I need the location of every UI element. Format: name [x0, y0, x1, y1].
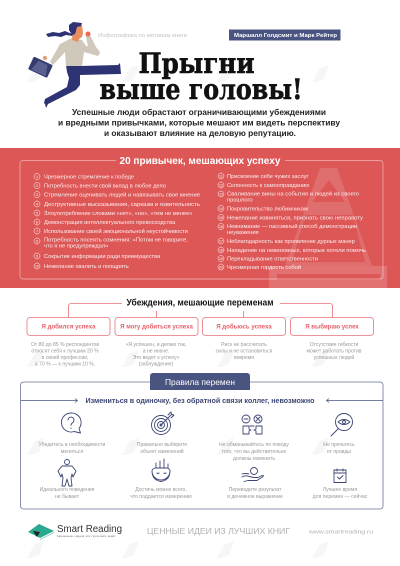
- habits left column: 2: [36, 184, 38, 188]
- belief 1: а 70 % — к лучшим 10 %.: [35, 362, 95, 368]
- rules heading: Правила перемен: [165, 377, 235, 387]
- rule text 8: для перемен — сейчас: [313, 493, 368, 500]
- rule text 6: что поддается измерению: [130, 494, 192, 500]
- rule text 4: [323, 442, 355, 455]
- rule text 6: [130, 487, 192, 500]
- rule text 7: Переводите результат: [229, 487, 282, 493]
- habits right column: 19: [219, 257, 223, 261]
- habits left column: 7: [36, 230, 38, 234]
- rule text 5: не бывает: [55, 494, 80, 500]
- footer logo: Ценные идеи из лучших книг: [57, 534, 116, 538]
- belief 4: Я выбираю успех: [305, 324, 359, 330]
- habits right column: Чрезмерная гордость собой: [227, 264, 301, 271]
- habits left column: Потребность внести свой вклад в любое дело: [44, 182, 166, 190]
- illustration: running businessman: [28, 22, 121, 108]
- habits right column: Нежелание извиняться, признать свою неправоту: [227, 216, 363, 222]
- habits heading: 20 привычек, мешающих успеху: [120, 156, 281, 167]
- habits right column: 16: [219, 225, 223, 229]
- belief 2: Я могу добиться успеха: [120, 324, 193, 330]
- habits left column: [34, 174, 200, 270]
- rule text 2: [137, 442, 187, 455]
- icon: heads exchanging: [242, 415, 262, 434]
- rules frame: [20, 382, 383, 509]
- rule text 5: Идеального поведения: [40, 487, 95, 493]
- habits left column: Чрезмерное стремление к победе: [44, 174, 134, 180]
- habits right column: 14: [219, 207, 223, 211]
- belief 4: может работать против: [306, 348, 362, 354]
- habits right column: неуважения: [227, 230, 259, 236]
- icon: superhero figure: [58, 460, 76, 486]
- habits left column: Демонстрация интеллектуального превосходства: [44, 220, 176, 226]
- habits left column: Использование своей эмоциональной неустойчивости: [44, 228, 188, 235]
- belief 1: От 80 до 85 % респондентов: [31, 342, 99, 348]
- habits right column: Покровительство любимчикам: [227, 206, 308, 212]
- rules subtitle: Измениться в одиночку, без обратной связи коллег, невозможно: [86, 397, 314, 405]
- footer website: www.smartreading.ru: [308, 530, 373, 536]
- habits left column: 10: [35, 264, 39, 268]
- torso and arms: [50, 38, 100, 66]
- habits right column: Склонность к самооправданию: [227, 183, 310, 189]
- habits left column: 8: [36, 240, 38, 244]
- habits right column: 13: [219, 192, 223, 196]
- rule text 4: от правды: [327, 449, 351, 455]
- rule text 8: [313, 487, 368, 500]
- habits right column: 11: [219, 174, 223, 178]
- habits left column: что я не предупреждал»: [44, 244, 108, 250]
- habits right column: Сваливание вины на события и людей из своего: [227, 190, 359, 198]
- title: Прыгни: [138, 47, 254, 80]
- icon: eye in magnifier: [331, 414, 352, 436]
- habits right column: 20: [219, 266, 223, 270]
- belief 3: Риск не рассчитать: [221, 342, 267, 348]
- belief 3: вовремя: [234, 355, 254, 361]
- rule text 3: должны изменить: [233, 456, 275, 462]
- habits left column: 1: [36, 175, 38, 179]
- rule text 7: [227, 487, 283, 500]
- connector lines: [68, 304, 332, 317]
- watermark letter A: [285, 168, 372, 266]
- belief 1: в своей профессии,: [42, 354, 88, 361]
- briefcase: [28, 56, 53, 78]
- belief 2: а не иначе.: [143, 348, 169, 354]
- trousers: [44, 63, 121, 108]
- icon: calendar check: [334, 469, 346, 482]
- habits left column: Сокрытие информации ради преимущества: [44, 254, 161, 260]
- rule text 7: в денежное выражение: [227, 494, 283, 500]
- habits right column: 18: [219, 248, 223, 252]
- rules heading: [150, 373, 250, 390]
- belief 3: силы и не остановиться: [216, 348, 273, 354]
- arrows: [21, 398, 383, 402]
- rule text 4: Не прячьтесь: [323, 442, 355, 448]
- title: выше головы!: [100, 73, 302, 106]
- belief 3: Я добьюсь успеха: [216, 324, 272, 330]
- rule text 3: [219, 441, 289, 462]
- habits right column: [218, 173, 366, 271]
- rule text 2: Правильно выберите: [137, 442, 187, 448]
- belief 4: [290, 318, 374, 361]
- belief 4: Отсутствие гибкости: [310, 342, 359, 348]
- habits left column: Потребность посеять сомнения: «Потом не говорите,: [44, 238, 188, 244]
- belief 3: [202, 318, 286, 361]
- habits left column: 3: [36, 193, 38, 197]
- habits left column: Злоупотребление словами «нет», «но», «тем не менее»: [44, 211, 192, 217]
- habits left column: Стремление оценивать людей и навязывать свое мнение: [44, 192, 200, 198]
- habits right column: 15: [219, 216, 223, 220]
- subtitle: Успешные люди обрастают ограничивающими убеждениями: [72, 108, 326, 117]
- rule text 1: меняться: [61, 449, 83, 455]
- belief 1: относят себя к лучшим 20 %: [31, 348, 99, 354]
- belief 2: «Я успешен, и делаю так,: [126, 342, 186, 348]
- rule text 8: Лучшее время: [323, 487, 357, 493]
- belief 2: Это ведет к успеху»: [132, 355, 180, 361]
- icon: question bubble: [61, 413, 81, 433]
- belief 2: [115, 318, 198, 368]
- panel: rules of change: [20, 373, 383, 509]
- subtitle: и оказывают влияние на деловую репутацию.: [104, 129, 296, 138]
- habits right column: прошлого: [227, 198, 253, 204]
- habits left column: 6: [36, 220, 38, 224]
- habits left column: 5: [36, 212, 38, 216]
- rule text 3: Не обманывайтесь по поводу: [219, 441, 289, 448]
- subtitle: [58, 108, 341, 138]
- habits left column: 9: [36, 254, 38, 258]
- footer slogan: ЦЕННЫЕ ИДЕИ ИЗ ЛУЧШИХ КНИГ: [147, 526, 290, 536]
- icon: head with chart: [152, 459, 170, 482]
- tie: [46, 31, 73, 37]
- footer logo: [28, 524, 122, 540]
- rule text 6: Достичь можно всего,: [135, 487, 187, 493]
- habits right column: Перекладывание ответственности: [227, 256, 318, 262]
- rule text 5: [40, 487, 95, 500]
- authors badge: [229, 30, 340, 40]
- heading: beliefs: Убеждения, мешающие переменам: [126, 298, 274, 308]
- rule text 2: объект изменений: [140, 448, 184, 455]
- rule text 1: Убедитесь в необходимости: [39, 442, 105, 448]
- panel: 20 habits: [0, 148, 400, 288]
- rule text 3: того, что вы действительно: [222, 448, 287, 455]
- habits left column: 4: [36, 202, 38, 206]
- habits left column: Нежелание хвалить и поощрять: [44, 264, 129, 270]
- title: [100, 47, 302, 106]
- habits right column: Присвоение себе чужих заслуг: [227, 174, 309, 180]
- icon: target: [152, 412, 174, 434]
- belief 4: успешных людей: [314, 354, 354, 361]
- habits right column: 12: [219, 184, 223, 188]
- belief 1: Я добился успеха: [42, 324, 96, 330]
- head: [72, 25, 83, 42]
- footer logo: Smart Reading: [57, 524, 122, 535]
- subtitle: и вредными привычками, которые мешают им видеть перспективу: [58, 118, 341, 128]
- authors badge: Маршалл Голдсмит и Марк Рейтер: [234, 32, 338, 39]
- habits right column: Неблагодарность как проявление дурных манер: [227, 239, 355, 245]
- habits right column: 17: [219, 240, 223, 244]
- habits frame: [20, 160, 383, 279]
- hand: [86, 32, 90, 36]
- habits right column: Нападение на невиновных, которые хотели помочь: [227, 248, 366, 254]
- habits right column: Невнимание — пассивный способ демонстрации: [227, 223, 357, 230]
- label: infographic source: Инфографика по мотивам книги: [98, 33, 187, 39]
- habits left column: Деструктивные высказывания, сарказм и язвительность: [44, 202, 200, 208]
- rule text 1: [39, 442, 105, 455]
- belief 1: [27, 318, 110, 368]
- belief 2: (заблуждение): [139, 362, 174, 368]
- icon: coin on hand: [242, 468, 263, 482]
- panel: beliefs: [27, 318, 374, 368]
